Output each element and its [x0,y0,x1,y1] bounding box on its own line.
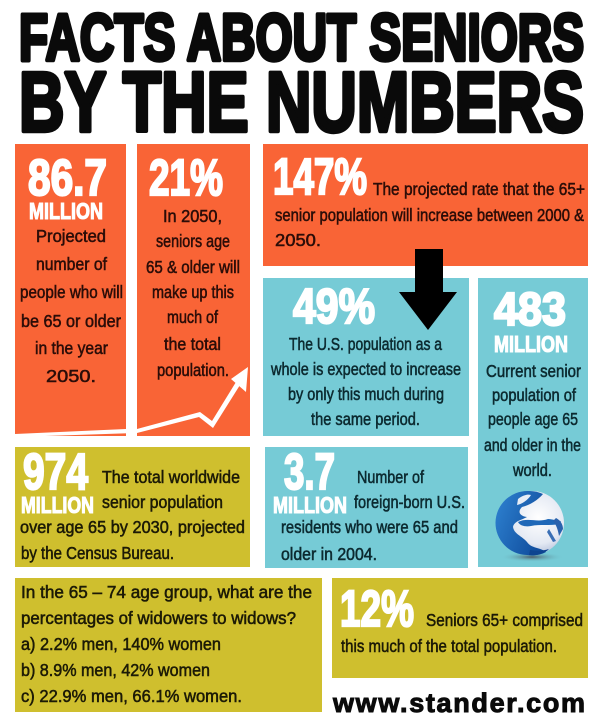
text: share of population: this much of the total population. [341,636,557,656]
text: seniors share: the total [164,334,221,354]
icon: globe [496,491,564,562]
label: million: MILLION [29,198,103,224]
text: US population: by only this much during [288,384,444,404]
number: 49%: 49% [293,280,375,334]
text: question and answers: percentages of widowers to widows? [21,608,296,628]
text: current population: Current senior [486,361,581,381]
text: worldwide population: senior population [102,492,223,512]
text: US population: whole is expected to increase [270,359,461,379]
text: projected rate [275,179,585,250]
text: seniors share: make up this [152,282,234,302]
text: foreign-born residents: older in 2004. [281,544,377,564]
panel: widowers question [15,578,322,712]
text: worldwide population: by the Census Bureau. [21,543,174,563]
text: US population [270,334,461,429]
panel: 974 million [15,443,250,567]
text: current population: population of [492,385,576,405]
text: US population: The U.S. population as a [289,334,442,354]
text: US population: the same period. [311,409,420,429]
text: seniors share [146,206,240,380]
text: question and answers: In the 65 – 74 age group, what are the [21,582,312,602]
text: seniors share: population. [157,360,229,380]
panel: 86.7 million [15,144,126,436]
text: foreign-born residents: residents who were 65 and [281,517,458,537]
text: seniors share: 65 & older will [146,257,240,277]
number: 483: 483 [494,283,566,335]
text: question and answers [21,582,312,706]
text: foreign-born residents: Number of [357,467,424,487]
arrow: black down arrow [399,249,457,330]
text: worldwide population: The total worldwide [102,467,240,487]
text: projected rate: 2050. [275,230,321,250]
text: worldwide population [20,467,245,563]
number: 86.7: 86.7 [28,149,107,206]
website url: www.stander.com [332,688,585,718]
text: current population [484,361,581,480]
text: foreign-born residents [281,467,465,564]
text: projected number: in the year [35,338,108,358]
text: seniors share: much of [167,307,218,327]
text: worldwide population: over age 65 by 2030, projected [20,517,245,537]
text: projected number: be 65 or older [21,311,121,331]
text: current population: people age 65 [488,409,578,429]
number: 12%: 12% [340,580,414,637]
text: current population: world. [512,460,552,480]
panel: 49 percent [263,278,469,436]
text: question and answers: b) 8.9% men, 42% women [21,660,210,680]
text: question and answers: a) 2.2% men, 140% women [21,634,221,654]
label: million: MILLION [494,331,568,357]
number: 21%: 21% [149,149,223,206]
number: 3.7: 3.7 [284,443,335,500]
text: foreign-born residents: foreign-born U.S. [354,492,465,512]
panel: 21 percent [137,144,250,436]
title [19,0,584,149]
text: projected number [20,226,123,386]
label: million: MILLION [21,492,94,518]
number: 147%: 147% [273,148,367,205]
text: question and answers: c) 22.9% men, 66.1% women. [21,686,242,706]
panel: 483 million [478,278,588,567]
text: projected number: number of [36,254,107,274]
panel: 12 percent [332,578,588,678]
arrow: white trend line [15,367,248,437]
text: share of population [341,610,583,656]
number: 974: 974 [23,443,88,500]
text: projected number: Projected [36,226,106,246]
label: million: MILLION [273,492,347,518]
text: seniors share: In 2050, [163,206,222,226]
panel: 3.7 million [265,443,468,568]
text: projected number: people who will [20,282,123,302]
text: projected number: 2050. [46,366,96,386]
panel: 147 percent [263,144,588,266]
text: seniors share: seniors age [156,231,230,251]
